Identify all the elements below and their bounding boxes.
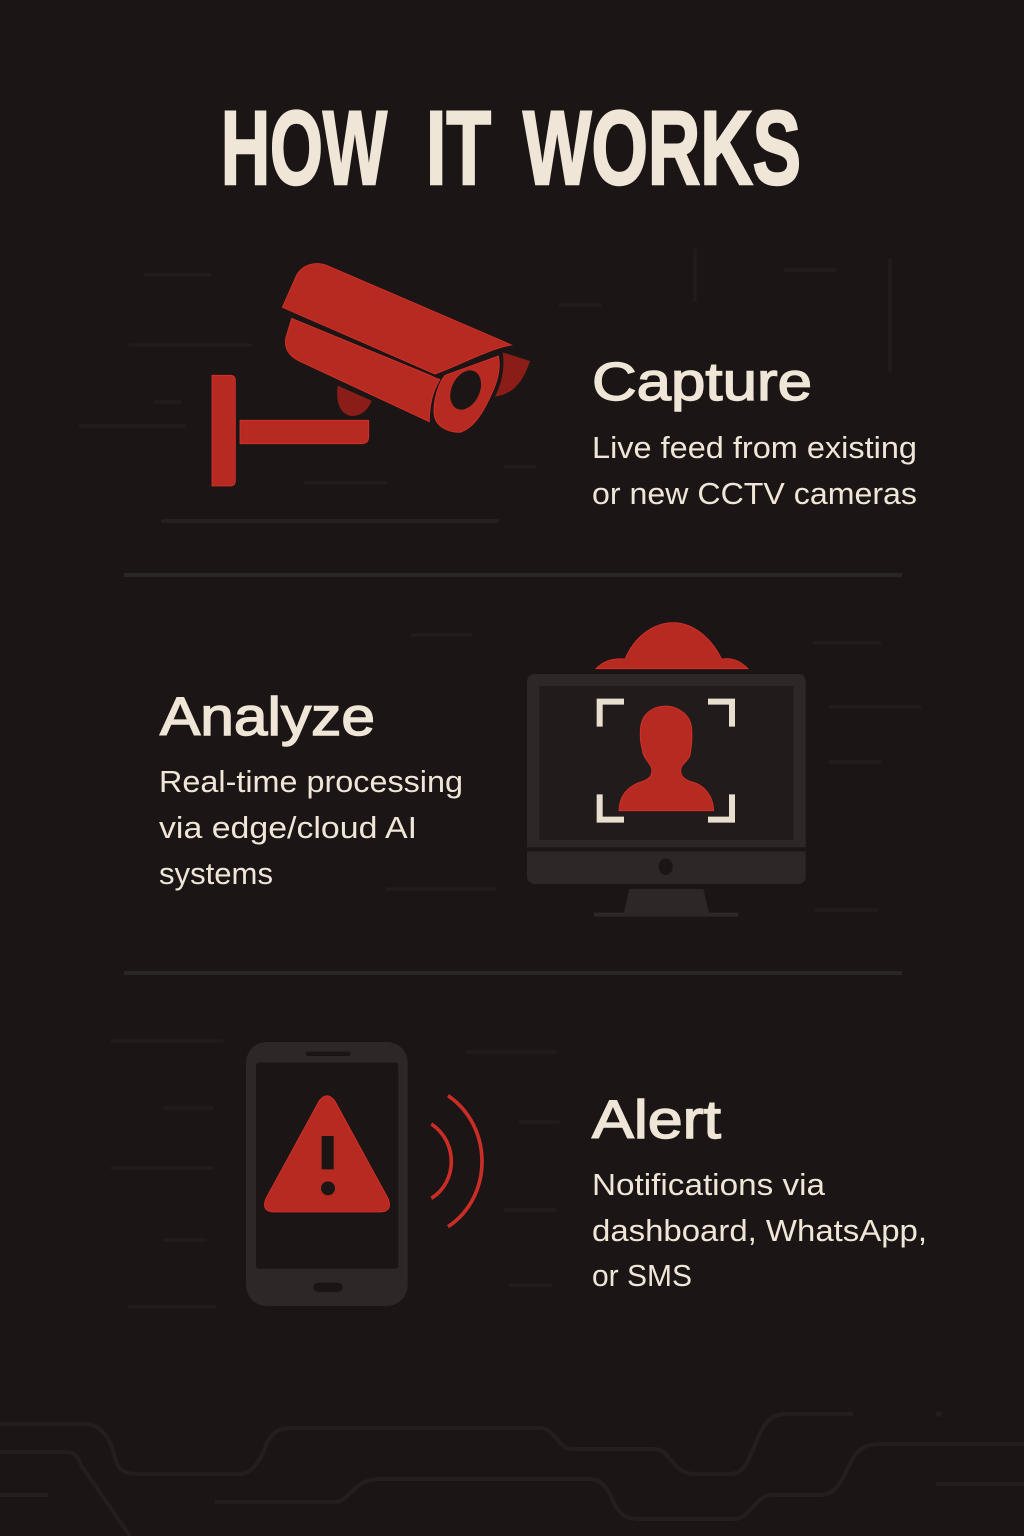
step 3 description: dashboard, WhatsApp,	[592, 1213, 927, 1248]
icon: phone with alert	[246, 1042, 482, 1306]
signal arcs	[431, 1096, 482, 1227]
title: WORKS	[523, 90, 801, 207]
step 2 heading: Analyze: Analyze	[160, 687, 375, 747]
title	[221, 90, 801, 207]
monitor	[527, 674, 806, 917]
step 3 description	[592, 1167, 927, 1293]
step 2 description: Real-time processing	[159, 764, 463, 799]
step 3 heading: Alert: Alert	[592, 1090, 721, 1150]
step 3 description: or SMS	[592, 1258, 692, 1293]
icon: warning triangle	[265, 1096, 390, 1212]
step 1 description: or new CCTV cameras	[592, 476, 917, 511]
step 2 description: systems	[159, 856, 273, 891]
circuit traces background	[0, 1411, 1024, 1536]
step 1 heading: Capture: Capture	[592, 352, 812, 412]
face scan brackets	[600, 702, 732, 820]
step 1 description: Live feed from existing	[592, 430, 917, 465]
step 2 description	[159, 764, 463, 891]
icon: monitor with face recognition and cloud	[527, 623, 806, 917]
title: IT	[426, 90, 491, 207]
step 3 description: Notifications via	[592, 1167, 826, 1202]
title: HOW	[221, 90, 387, 207]
icon: person silhouette	[619, 706, 714, 811]
step 1 description	[592, 430, 917, 511]
icon: security camera	[212, 264, 530, 486]
phone body	[246, 1042, 408, 1306]
step 2 description: via edge/cloud AI	[159, 810, 417, 845]
icon: cloud	[596, 623, 748, 669]
